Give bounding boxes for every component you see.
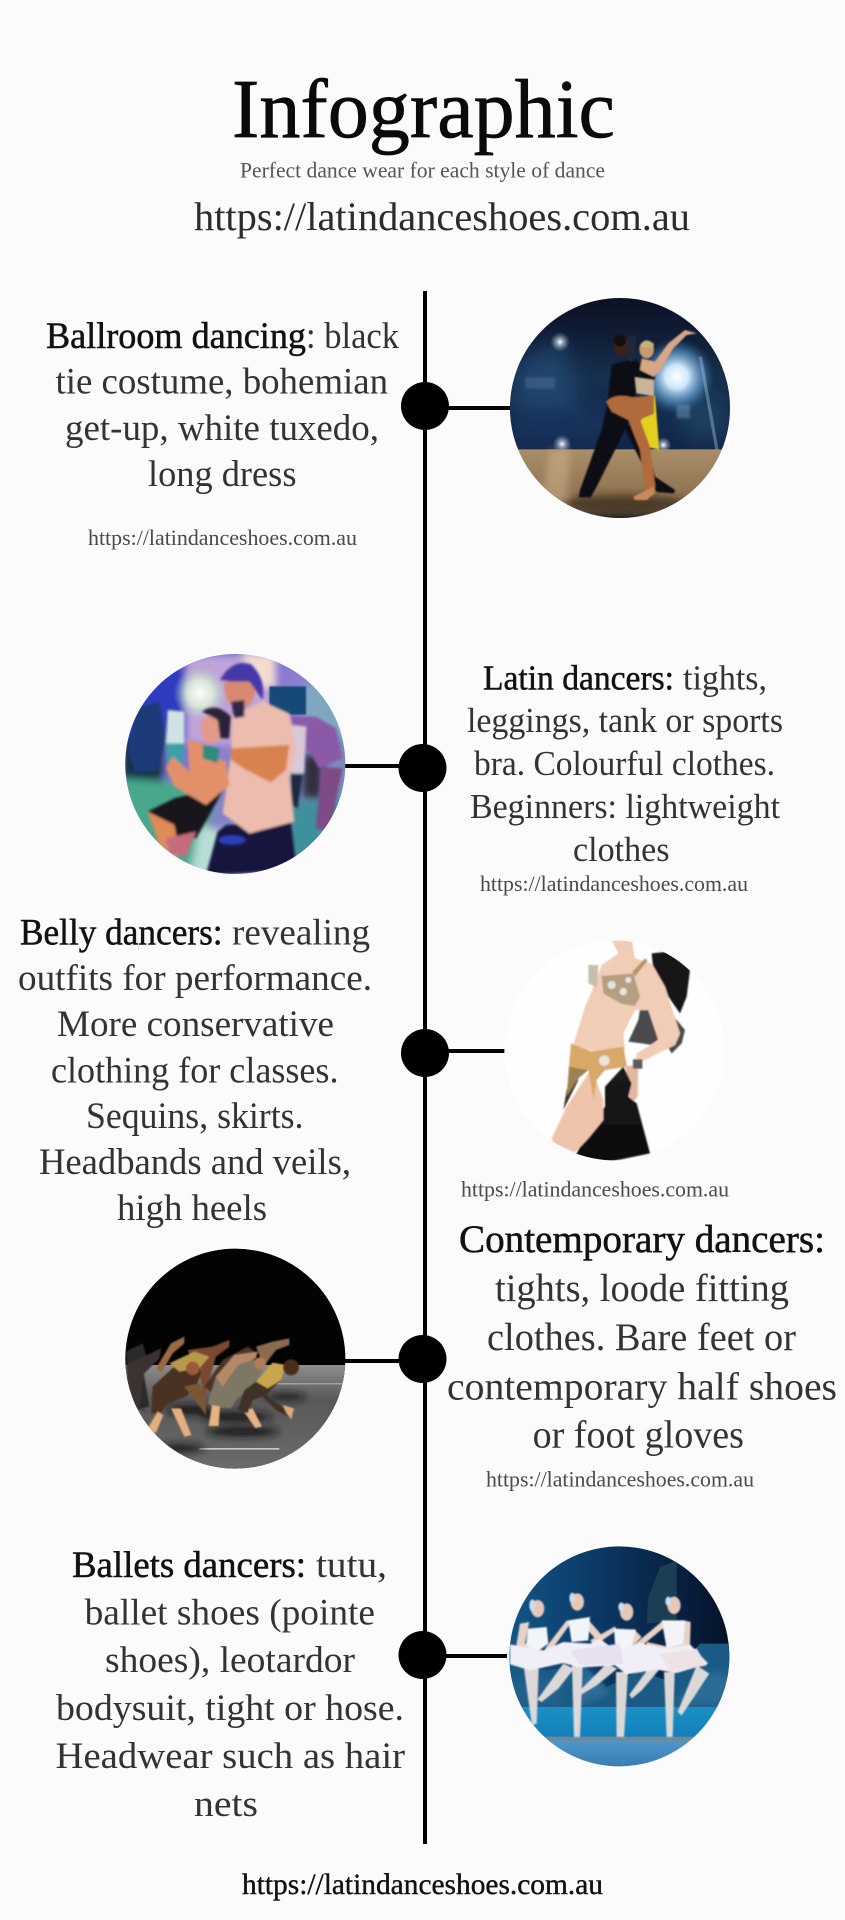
text: belly dancers: revealing <box>232 912 370 954</box>
text: ballets dancers: ballet shoes (pointe <box>85 1592 375 1634</box>
link: latin: https://latindanceshoes.com.au <box>480 871 748 896</box>
legs <box>524 1664 709 1737</box>
tutus <box>510 1639 708 1674</box>
text: ballroom dancing: tie costume, bohemian <box>56 362 388 403</box>
man <box>206 822 296 875</box>
text: contemporary dancers: clothes. Bare feet or <box>487 1316 796 1359</box>
heads <box>531 1593 681 1621</box>
back row <box>126 1343 149 1410</box>
text: contemporary dancers <box>447 1218 837 1457</box>
text: ballets dancers: Headwear such as hair <box>56 1736 405 1777</box>
text: latin dancers: Latin dancers: <box>483 658 674 697</box>
text: ballets dancers <box>56 1545 405 1825</box>
bodices and arms <box>515 1620 692 1650</box>
text: ballets dancers: tutu, <box>316 1545 387 1586</box>
photo: contemporary dancers <box>125 1248 346 1469</box>
text: ballroom dancing <box>46 316 399 495</box>
footer url: https://latindanceshoes.com.au <box>242 1868 603 1901</box>
skirt <box>575 1067 650 1163</box>
photo: ballroom dancers <box>510 298 730 518</box>
subtitle: Perfect dance wear for each style of dance <box>240 158 605 182</box>
background people <box>128 702 166 772</box>
title: Infographic <box>232 63 615 156</box>
photo: latin dancers <box>125 654 346 874</box>
text: latin dancers: bra. Colourful clothes. <box>474 744 775 783</box>
text: latin dancers: leggings, tank or sports <box>467 701 783 740</box>
text: belly dancers: high heels <box>117 1188 267 1229</box>
node 2: latin dot and connector <box>343 744 446 792</box>
man <box>579 358 655 497</box>
link: ballroom: https://latindanceshoes.com.au <box>88 525 357 550</box>
text: ballets dancers: bodysuit, tight or hose. <box>56 1688 404 1729</box>
node 3: belly dot and connector <box>401 1029 505 1077</box>
text: ballets dancers: nets <box>194 1784 258 1825</box>
front bodies <box>151 1362 201 1413</box>
link: contemporary: https://latindanceshoes.com.au <box>486 1466 754 1492</box>
text: latin dancers: Beginners: lightweight <box>470 787 780 826</box>
text: latin dancers: clothes <box>573 830 670 869</box>
woman <box>639 340 654 358</box>
text: contemporary dancers: tights, loode fitting <box>495 1267 789 1310</box>
node 1: ballroom dot and connector <box>401 382 513 430</box>
text: ballroom dancing: get-up, white tuxedo, <box>65 408 379 449</box>
text: belly dancers: Belly dancers: <box>20 912 223 954</box>
text: belly dancers <box>18 912 372 1229</box>
text: belly dancers: Headbands and veils, <box>39 1142 351 1183</box>
hair <box>652 952 690 1013</box>
hand <box>626 1064 638 1103</box>
photo: belly dancer <box>504 940 691 1160</box>
text: ballroom dancing: Ballroom dancing <box>46 316 306 357</box>
link: belly: https://latindanceshoes.com.au <box>461 1177 729 1202</box>
torso <box>573 940 680 1062</box>
header url: https://latindanceshoes.com.au <box>194 194 690 239</box>
node 4: contemporary dot and connector <box>343 1335 446 1383</box>
timeline spine <box>423 291 427 1844</box>
text: ballroom dancing: long dress <box>148 454 296 495</box>
text: belly dancers: clothing for classes. <box>51 1050 338 1092</box>
text: belly dancers: More conservative <box>57 1004 334 1045</box>
leg <box>552 1068 603 1153</box>
photo: ballet dancers <box>509 1546 730 1766</box>
belt <box>569 1043 627 1100</box>
text: contemporary dancers: contemporary half shoes <box>447 1366 837 1408</box>
text: ballroom dancing: : black <box>306 316 399 357</box>
bra <box>588 965 598 987</box>
text: contemporary dancers: or foot gloves <box>533 1414 744 1457</box>
text: contemporary dancers: Contemporary dancers: <box>459 1218 825 1261</box>
text: latin dancers <box>467 658 783 869</box>
text: latin dancers: tights, <box>683 658 767 697</box>
text: ballets dancers: shoes), leotardor <box>105 1640 355 1681</box>
text: belly dancers: outfits for performance. <box>18 958 372 999</box>
woman <box>148 785 226 838</box>
node 5: ballet dot and connector <box>398 1631 507 1679</box>
text: belly dancers: Sequins, skirts. <box>86 1096 304 1137</box>
text: ballets dancers: Ballets dancers: <box>72 1545 306 1586</box>
